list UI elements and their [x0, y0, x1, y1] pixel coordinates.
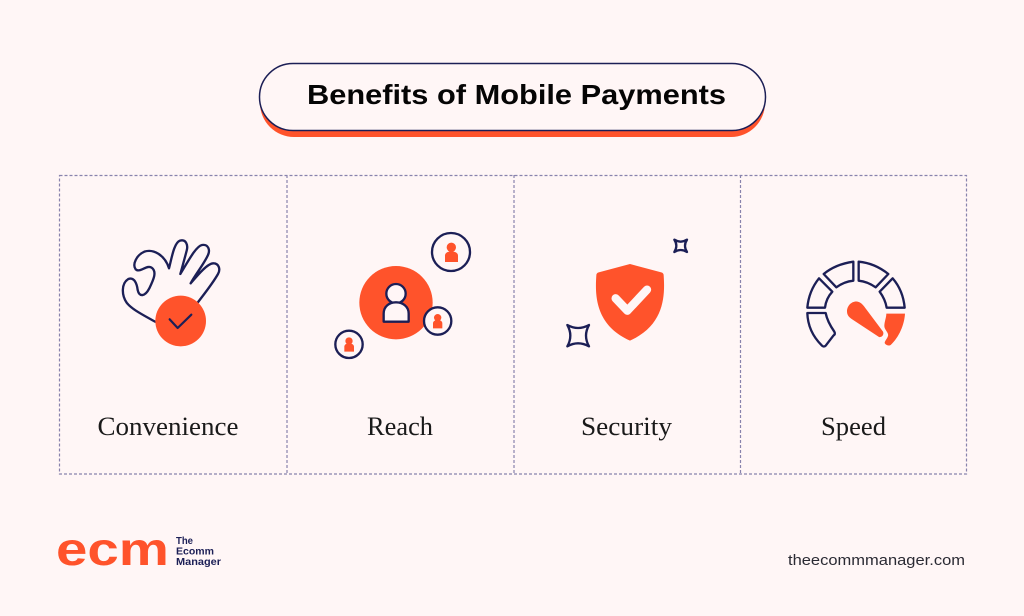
logo wordmark	[176, 535, 221, 568]
panel: speed	[807, 262, 905, 441]
icon: connected people	[335, 233, 470, 358]
logo wordmark: The	[176, 535, 193, 547]
label: Security: Security	[581, 411, 673, 441]
logo wordmark: Ecomm	[176, 546, 214, 558]
logo: ecm: ecm	[56, 523, 169, 575]
panel: reach	[335, 233, 470, 441]
logo: ecm	[56, 523, 221, 575]
website url: theecommmanager.com	[788, 553, 965, 569]
title pill	[260, 64, 766, 137]
title: Benefits of Mobile Payments	[307, 79, 726, 110]
icon: speedometer	[807, 262, 905, 347]
icon: shield with sparkles	[567, 240, 687, 346]
icon: hand with check	[123, 240, 219, 346]
panel: convenience	[98, 240, 238, 441]
label: Convenience: Convenience	[98, 411, 238, 441]
label: Speed: Speed	[821, 411, 886, 441]
panels grid	[60, 175, 966, 474]
logo wordmark: Manager	[176, 556, 221, 568]
panel: security	[567, 240, 687, 441]
label: Reach: Reach	[367, 411, 433, 441]
